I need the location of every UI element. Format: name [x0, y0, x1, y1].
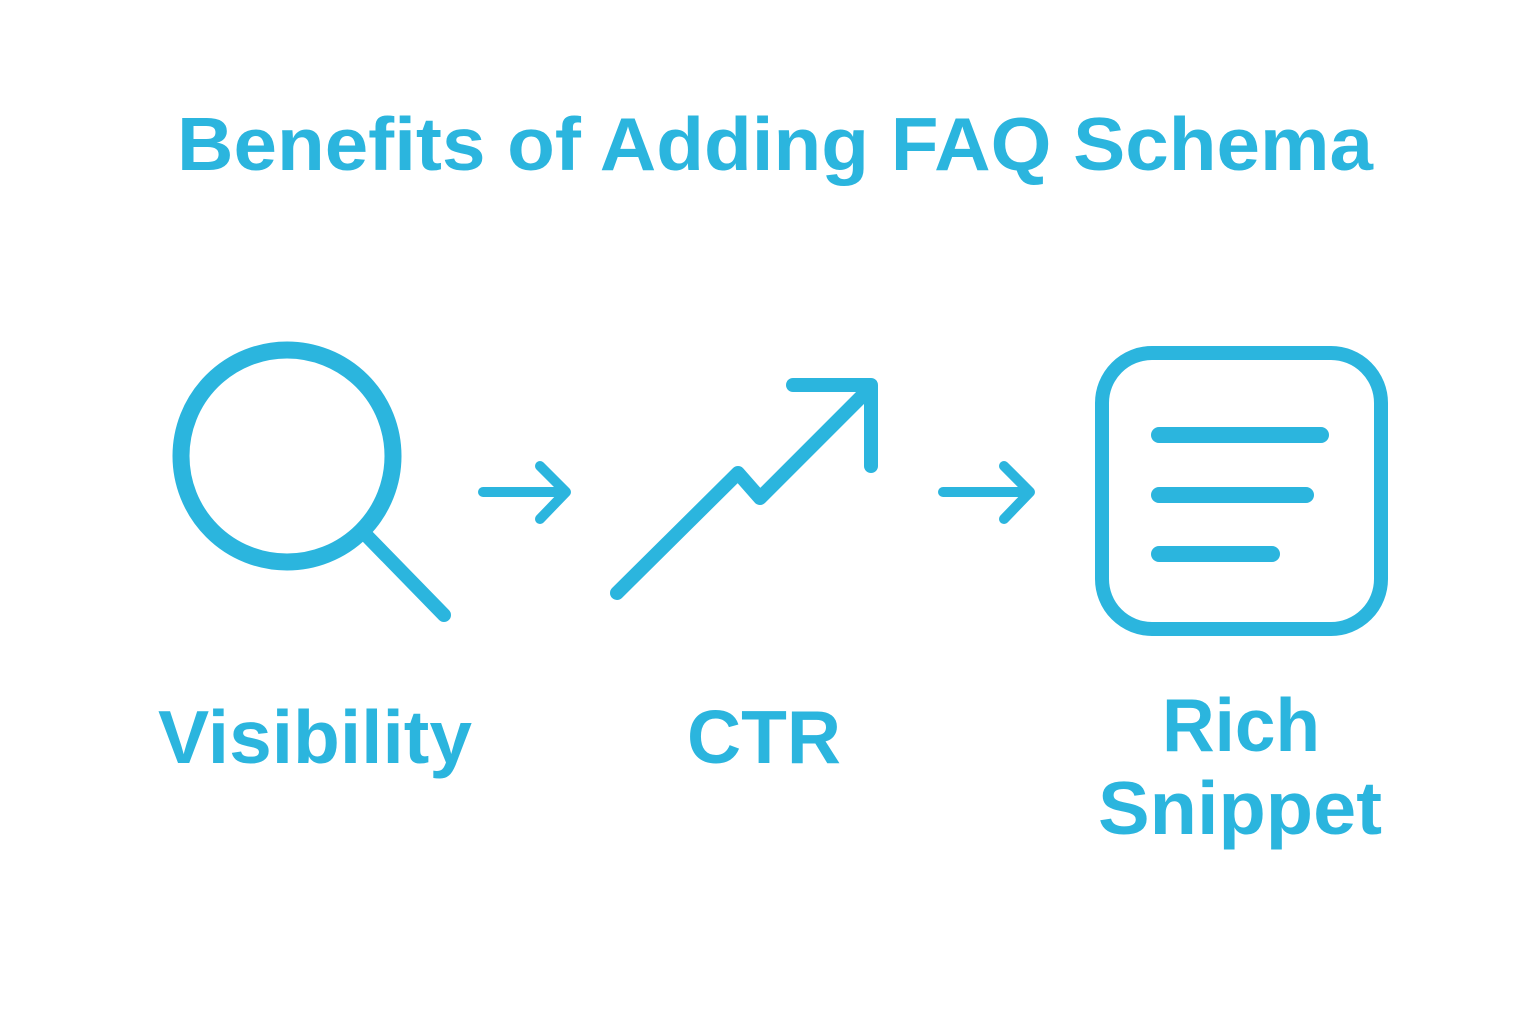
label: Rich Snippet — [1098, 683, 1382, 850]
icon: magnifying glass — [181, 350, 444, 615]
label: CTR: CTR — [687, 695, 841, 779]
icon: rich snippet card — [1102, 353, 1381, 629]
title: Benefits of Adding FAQ Schema — [177, 102, 1374, 186]
label: Rich Snippet: Snippet — [1098, 766, 1382, 850]
label: Visibility: Visibility — [158, 695, 472, 779]
arrow: visibility to CTR — [483, 466, 566, 519]
icon: rising trend arrow — [617, 385, 871, 593]
arrow: CTR to rich snippet — [943, 466, 1030, 519]
label: Rich Snippet: Rich — [1162, 683, 1320, 767]
